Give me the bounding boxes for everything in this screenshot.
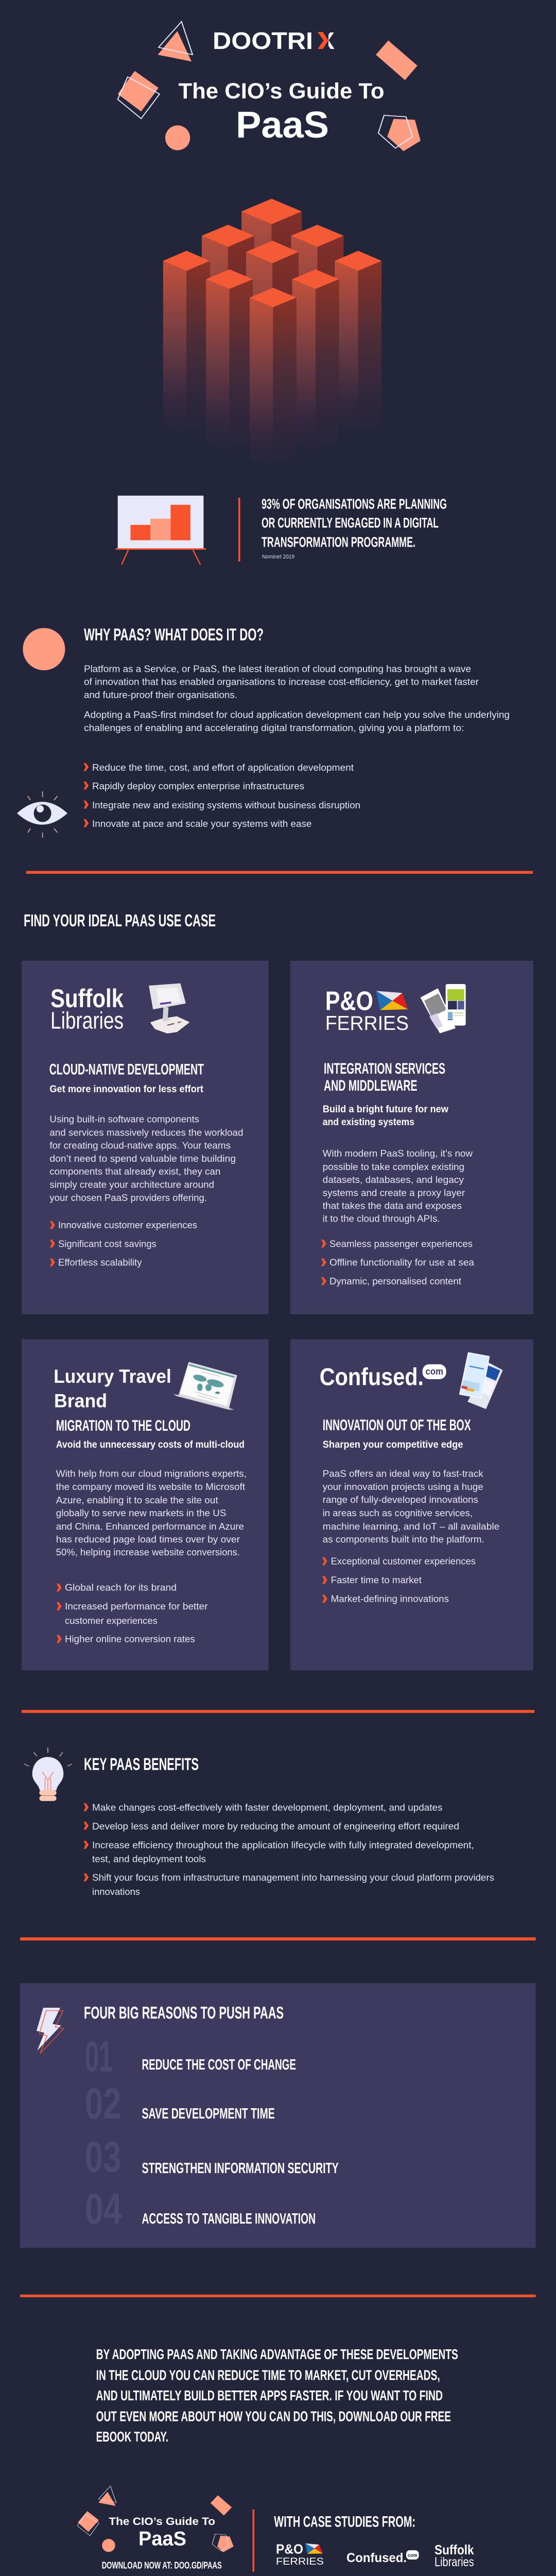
logo: Confused.com: com [408, 2553, 418, 2558]
intro paragraphs: challenges of enabling and accelerating digital transformation, giving you a platform to: [84, 722, 464, 733]
footer: case studies [274, 2513, 474, 2569]
download link text: DOWNLOAD NOW AT: DOO.GD/PAAS [102, 2561, 222, 2571]
decorative shape: square [118, 71, 160, 118]
body text [56, 1468, 247, 1557]
logo: Suffolk Libraries: Suffolk [435, 2542, 474, 2557]
bullet list [321, 1238, 475, 1286]
intro paragraphs: and future-proof their organisations. [84, 689, 237, 700]
bullet list: customer experiences [65, 1615, 158, 1626]
closing paragraph [96, 2346, 458, 2445]
logo: Suffolk Libraries [435, 2542, 474, 2569]
bullet list [322, 1556, 476, 1604]
body text: 50%, helping increase website conversions. [56, 1547, 240, 1557]
body text: and China. Enhanced performance in Azure [56, 1521, 244, 1532]
header: logo and title [118, 22, 421, 151]
bullet list: Global reach for its brand [65, 1582, 177, 1593]
panel: Confused.com innovation out of the box [290, 1339, 533, 1670]
logo: P&O Ferries [325, 987, 409, 1035]
icon: peach circle [23, 628, 65, 670]
reason 02: 02 [85, 2079, 121, 2128]
closing paragraph: EBOOK TODAY. [96, 2429, 168, 2445]
heading: four big reasons: FOUR BIG REASONS TO PUSH PAAS [84, 2003, 284, 2022]
heading: key PaaS benefits: KEY PAAS BENEFITS [84, 1755, 199, 1773]
title [178, 79, 384, 146]
bullet list: Offline functionality for use at sea [329, 1257, 475, 1268]
bullet list: Market-defining innovations [331, 1594, 449, 1604]
title: The CIO’s Guide To [178, 79, 384, 104]
reason 01 [85, 2032, 296, 2080]
bullet list: platform benefits [83, 762, 360, 829]
heading: innovation out of the box: INNOVATION OUT OF THE BOX [323, 1417, 471, 1434]
logo: Dootrix [214, 32, 335, 49]
stat text: 93% of organisations [262, 496, 447, 560]
logo: Confused.com: Confused. [346, 2551, 407, 2565]
body text: With help from our cloud migrations experts, [56, 1468, 247, 1479]
bullet list: Innovative customer experiences [58, 1219, 197, 1230]
logo: P&O Ferries: P&O [325, 987, 373, 1016]
heading: find your use case: FIND YOUR IDEAL PAAS USE CASE [24, 911, 216, 930]
body text: datasets, databases, and legacy [323, 1174, 464, 1185]
bullet list: platform benefits: Innovate at pace and scale your systems with ease [92, 818, 311, 829]
bullet list: Effortless scalability [58, 1257, 142, 1268]
body text: your innovation projects using a huge [323, 1481, 483, 1492]
panel: four big reasons [20, 1983, 536, 2248]
logo: Suffolk Libraries: Libraries [435, 2555, 474, 2569]
bullet list: Dynamic, personalised content [329, 1276, 461, 1286]
image: phones [460, 1353, 502, 1408]
panel: Luxury Travel Brand migration to the cloud [22, 1339, 269, 1670]
logo: Luxury Travel Brand [54, 1366, 171, 1412]
body text: With modern PaaS tooling, it’s now [323, 1148, 473, 1159]
intro paragraphs: Platform as a Service, or PaaS, the latest iteration of cloud computing has brought a wave [84, 664, 471, 674]
badge title: The CIO’s Guide To [109, 2516, 215, 2528]
body text: range of fully-developed innovations [323, 1494, 478, 1505]
icon: presentation board with bar chart [116, 496, 206, 565]
image: kiosk [150, 984, 189, 1033]
panel: Suffolk Libraries cloud-native development [22, 961, 269, 1314]
bullet list: platform benefits: Rapidly deploy complex enterprise infrastructures [92, 781, 304, 791]
image: phones [421, 984, 466, 1032]
heading: why PaaS: WHY PAAS? WHAT DOES IT DO? [84, 625, 264, 644]
logo: P&O Ferries: P&O [276, 2541, 303, 2557]
heading: migration to the cloud: MIGRATION TO THE CLOUD [56, 1417, 190, 1434]
logo: Dootrix: X [318, 27, 335, 54]
bullet list: Significant cost savings [58, 1238, 157, 1249]
panel: P&O Ferries integration services [290, 961, 533, 1314]
subheading: Build a bright future for new [323, 1104, 448, 1115]
icon: eye [17, 791, 67, 838]
bullet list: Shift your focus from infrastructure management into harnessing your cloud platform providers [92, 1872, 494, 1883]
bullet list: Increase efficiency throughout the application lifecycle with fully integrated development, [92, 1840, 474, 1851]
reason 02 [85, 2079, 275, 2128]
bullet list: Increased performance for better [65, 1601, 208, 1612]
logo: P&O Ferries: FERRIES [276, 2556, 324, 2567]
body text: and services massively reduces the workload [49, 1127, 243, 1138]
bullet list: Develop less and deliver more by reducing the amount of engineering effort required [92, 1821, 459, 1832]
body text: PaaS offers an ideal way to fast-track [323, 1468, 483, 1479]
reason 03 [85, 2133, 339, 2181]
reason 02: SAVE DEVELOPMENT TIME [142, 2106, 275, 2122]
body text: globally to serve new markets in the US [56, 1507, 226, 1518]
body text: possible to take complex existing [323, 1161, 464, 1172]
body text: simply create your architecture around [49, 1179, 214, 1190]
body text: Azure, enabling it to scale the site out [56, 1495, 218, 1505]
section: key PaaS benefits [24, 1748, 494, 1897]
reason 01: 01 [85, 2032, 113, 2080]
body text: the company moved its website to Microsoft [56, 1481, 245, 1492]
subheading: Sharpen your competitive edge [323, 1439, 463, 1450]
bullet list: Faster time to market [331, 1574, 422, 1585]
badge title [109, 2516, 215, 2550]
bullet list: innovations [92, 1886, 140, 1897]
stat text: 93% of organisations: Nominet 2019 [262, 554, 294, 560]
reason 03: 03 [85, 2133, 121, 2181]
bullet list [83, 1802, 494, 1897]
logo: Suffolk Libraries: Suffolk [50, 984, 124, 1013]
subheading: Avoid the unnecessary costs of multi-cloud [56, 1439, 245, 1450]
logo: P&O Ferries [276, 2541, 324, 2567]
logo: Dootrix: DOOTRI [213, 27, 313, 54]
logo: Suffolk Libraries [50, 984, 124, 1034]
body text: your chosen PaaS providers offering. [49, 1192, 207, 1203]
reason 01: REDUCE THE COST OF CHANGE [142, 2057, 296, 2073]
heading: cloud-native development: CLOUD-NATIVE DEVELOPMENT [49, 1061, 204, 1078]
body text: that takes the data and exposes [323, 1200, 462, 1211]
bullet list: Higher online conversion rates [65, 1634, 195, 1645]
badge title: PaaS [138, 2528, 186, 2550]
reason 04 [85, 2184, 316, 2233]
body text [323, 1148, 473, 1224]
bullet list [57, 1582, 208, 1645]
illustration: isometric columns [163, 199, 381, 467]
stat divider [238, 498, 240, 562]
stat text: 93% of organisations: TRANSFORMATION PROGRAMME. [262, 534, 415, 550]
logo: Luxury Travel Brand: Brand [54, 1391, 107, 1412]
subheading: and existing systems [323, 1117, 414, 1128]
body text: as components built into the platform. [323, 1534, 484, 1545]
logo: Suffolk Libraries: Libraries [50, 1007, 124, 1034]
logo: Luxury Travel Brand: Luxury Travel [54, 1366, 171, 1387]
decorative shape: triangle [158, 22, 193, 61]
icon: lightning bolt [37, 2008, 64, 2054]
bullet list: test, and deployment tools [92, 1854, 206, 1865]
section: why PaaS [17, 625, 510, 838]
body text: Using built-in software components [49, 1114, 199, 1125]
reason 04: ACCESS TO TANGIBLE INNOVATION [142, 2211, 316, 2227]
stat text: 93% of organisations: OR CURRENTLY ENGAGED IN A DIGITAL [262, 515, 439, 531]
body text: machine learning, and IoT – all available [323, 1521, 499, 1532]
subheading: Get more innovation for less effort [49, 1084, 204, 1095]
intro paragraphs: Adopting a PaaS-first mindset for cloud application development can help you solve the underlying [84, 709, 510, 720]
body text: systems and create a proxy layer [323, 1187, 465, 1198]
body text: components that already exist, they can [49, 1166, 220, 1177]
footer: ebook badge [77, 2486, 234, 2571]
bullet list: Make changes cost-effectively with faster development, deployment, and updates [92, 1802, 443, 1813]
body text: in areas such as cognitive services, [323, 1507, 473, 1518]
icon: light bulb [24, 1748, 72, 1801]
logo: P&O Ferries: FERRIES [325, 1012, 409, 1035]
footer divider [252, 2510, 254, 2572]
stat text: 93% of organisations: 93% OF ORGANISATIONS ARE PLANNING [262, 496, 447, 512]
body text: for creating cloud-native apps. Your teams [49, 1140, 231, 1151]
bullet list: platform benefits: Integrate new and existing systems without business disruption [92, 800, 360, 810]
decorative shapes [77, 2486, 234, 2552]
reason 04: 04 [85, 2184, 122, 2233]
subheading [323, 1104, 448, 1128]
body text: don’t need to spend valuable time building [49, 1153, 236, 1164]
title: PaaS [236, 105, 329, 146]
heading: integration services: INTEGRATION SERVICES [324, 1060, 445, 1077]
reason 03: STRENGTHEN INFORMATION SECURITY [142, 2160, 339, 2177]
intro paragraphs: of innovation that has enabled organisations to increase cost-efficiency, get to market faster [84, 676, 479, 687]
bullet list: Exceptional customer experiences [331, 1556, 476, 1567]
body text [49, 1114, 243, 1203]
body text: has reduced page load times over by over [56, 1534, 240, 1545]
decorative shape: circle [165, 125, 190, 150]
bullet list: Seamless passenger experiences [329, 1238, 473, 1249]
heading: integration services [324, 1060, 445, 1094]
decorative shape: pentagon [378, 115, 421, 151]
body text [323, 1468, 499, 1545]
image: laptop with world map [173, 1362, 237, 1410]
heading: integration services: AND MIDDLEWARE [324, 1077, 418, 1094]
body text: it to the cloud through APIs. [323, 1213, 440, 1224]
decorative shape: rotated rectangle [376, 41, 418, 80]
logo: Confused.com: com [425, 1366, 443, 1377]
bullet list: platform benefits: Reduce the time, cost, and effort of application development [92, 762, 354, 773]
logo: Confused.com: Confused. [320, 1363, 424, 1390]
bullet list [50, 1219, 197, 1268]
intro paragraphs [84, 664, 510, 733]
heading: with case studies from: WITH CASE STUDIES FROM: [274, 2513, 415, 2530]
